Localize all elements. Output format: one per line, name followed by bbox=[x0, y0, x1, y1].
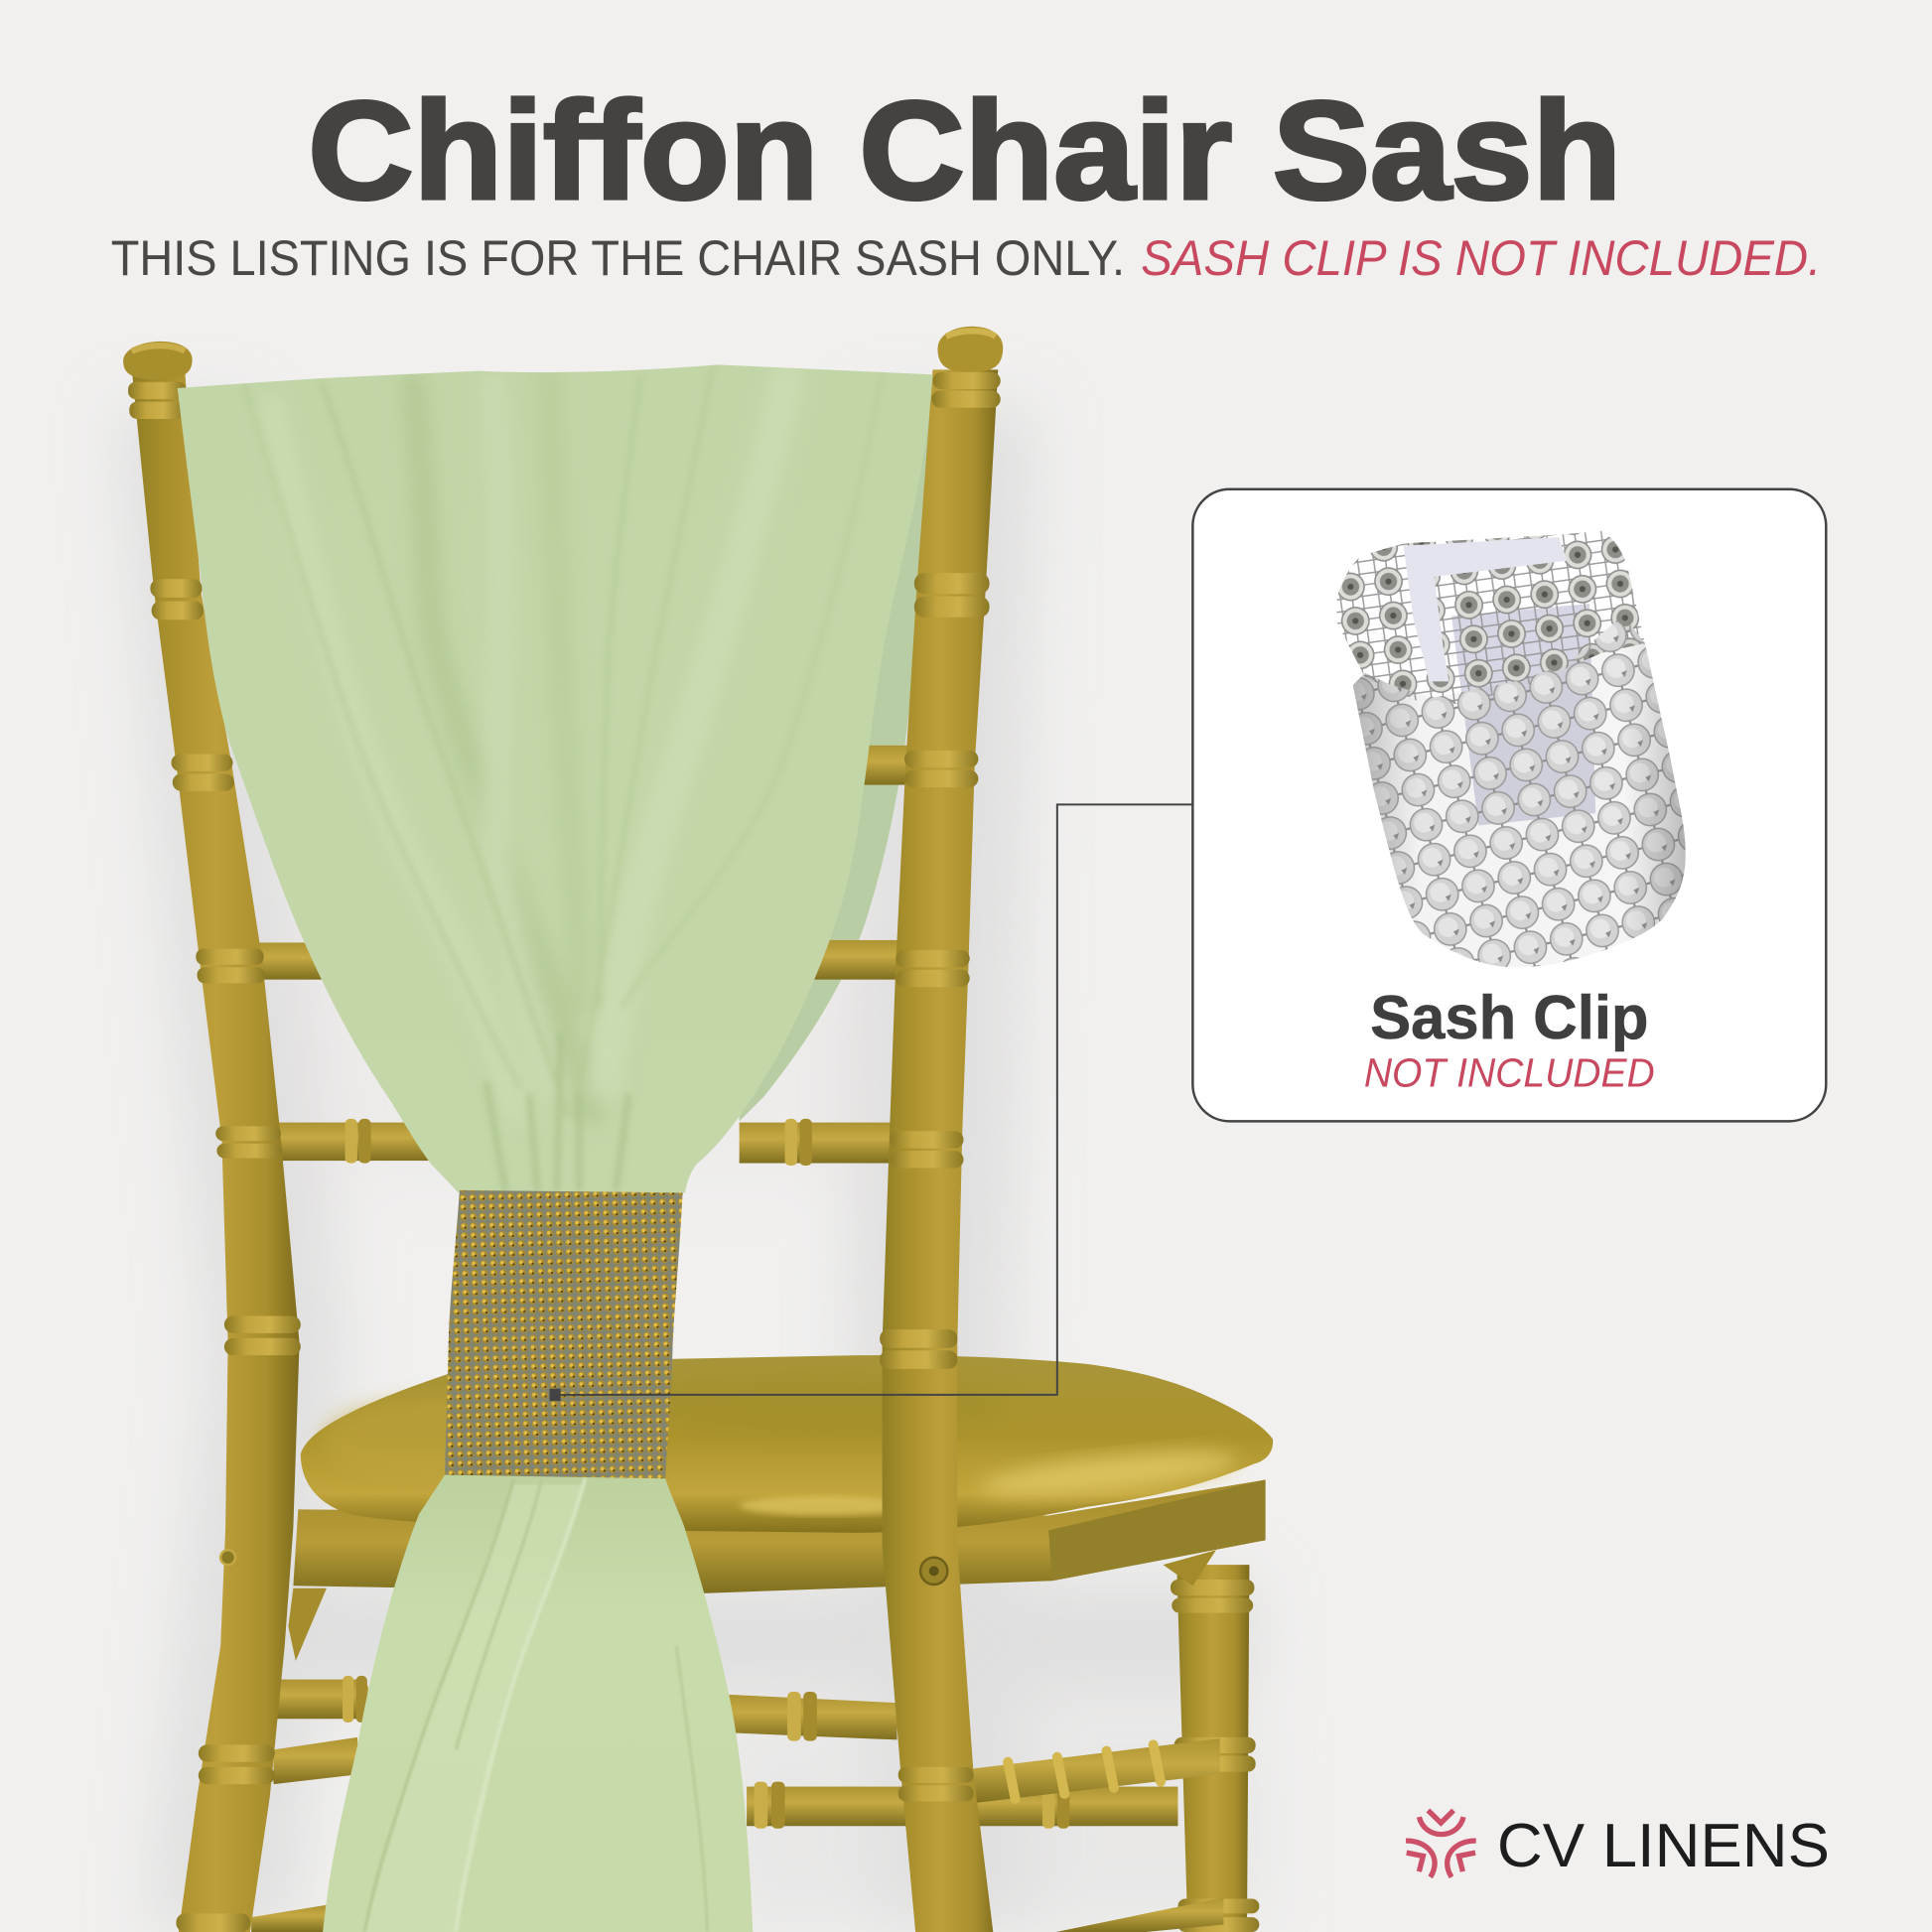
chair with sash photo illustration bbox=[117, 327, 1273, 1932]
label: not included: NOT INCLUDED bbox=[1364, 1050, 1655, 1096]
subtitle: listing note bbox=[111, 230, 1821, 286]
soft background shadows bbox=[117, 407, 1269, 1932]
chair rungs bbox=[251, 746, 1223, 1932]
title: Chiffon Chair Sash bbox=[308, 72, 1621, 228]
logo wordmark: CV LINENS bbox=[1497, 1812, 1830, 1880]
chiffon sash, upper drape bbox=[178, 364, 932, 1192]
rhinestone mesh band on sash bbox=[445, 1190, 683, 1478]
subtitle: listing note: THIS LISTING IS FOR THE CHAIR SASH ONLY. bbox=[111, 230, 1125, 286]
panel: sash clip callout bbox=[1192, 489, 1826, 1121]
rear right leg bbox=[1171, 1565, 1259, 1932]
chiffon sash, lower tail bbox=[323, 1475, 753, 1932]
sash clip photo illustration bbox=[1337, 531, 1694, 973]
left back post bbox=[123, 342, 301, 1932]
sash back layer behind rungs bbox=[740, 374, 932, 1121]
callout leader line bbox=[550, 804, 1192, 1401]
seat frame bbox=[220, 1480, 1266, 1661]
icon: logo mark bbox=[1406, 1810, 1476, 1877]
front right post bbox=[880, 327, 1003, 1932]
subtitle: listing note: SASH CLIP IS NOT INCLUDED. bbox=[1141, 230, 1821, 286]
seat cushion bbox=[301, 1355, 1273, 1533]
label: sash clip: Sash Clip bbox=[1370, 984, 1649, 1052]
CV Linens logo bbox=[1406, 1810, 1830, 1880]
